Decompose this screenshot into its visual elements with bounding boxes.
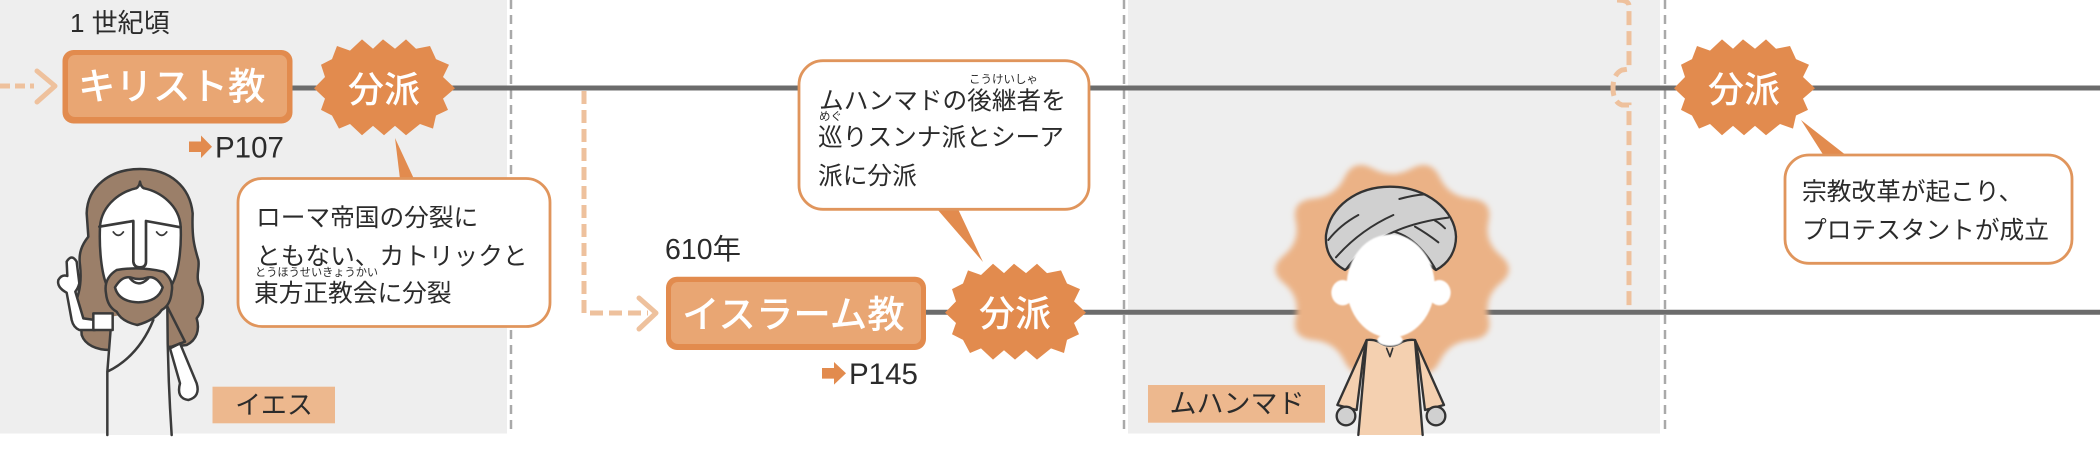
robe: [107, 307, 172, 435]
lowered arm: [170, 343, 198, 400]
callout: Sunni and Shia split: ムハンマドの後継者を: [819, 87, 1066, 115]
figure: Jesus: [58, 169, 203, 435]
badge: schism 3: 分派: [1708, 69, 1780, 110]
arrow: dashed branch to Islam: [584, 91, 656, 329]
callout: Roman Empire split: 東方正教会に分裂: [254, 280, 452, 308]
brow and nose: [99, 221, 181, 267]
badge: schism 1: 分派: [348, 69, 420, 110]
label: Jesus: [212, 387, 335, 423]
callout: Sunni and Shia split: めぐ: [819, 110, 842, 123]
timeline: upper line: [292, 86, 2100, 90]
callout: Reformation: プロテスタントが成立: [1802, 216, 2049, 244]
badge: schism 2: [945, 264, 1086, 360]
beard: [106, 268, 172, 325]
callout: Sunni and Shia split: [799, 61, 1089, 262]
hair: [76, 169, 203, 350]
box: Islam: [666, 277, 926, 350]
callout: Roman Empire split: ともない、カトリックと: [256, 244, 528, 270]
figure: Muhammad: [1326, 187, 1456, 435]
callout: Reformation: [1785, 120, 2072, 263]
box: Christianity: キリスト教: [78, 66, 266, 108]
turban: [1326, 187, 1456, 270]
hands: [1337, 407, 1355, 425]
box: Islam: イスラーム教: [682, 294, 905, 336]
box: Christianity: [62, 50, 292, 124]
eyes: [113, 232, 167, 235]
callout: Reformation: 宗教改革が起こり、: [1802, 178, 2023, 206]
page ref: P145: P145: [849, 358, 918, 391]
callout: Sunni and Shia split: 派に分派: [818, 163, 917, 190]
badge: schism 3: [1674, 39, 1815, 135]
badge: schism 2: 分派: [979, 293, 1051, 334]
raised arm: [58, 257, 95, 330]
callout: Roman Empire split: とうほうせいきょうかい: [255, 266, 378, 279]
callout: Roman Empire split: ローマ帝国の分裂に: [256, 204, 478, 232]
page ref: P107: P107: [215, 131, 284, 164]
text: 1 century date: 1 世紀頃: [70, 8, 170, 38]
torso: [1358, 340, 1423, 435]
label: Jesus: イエス: [235, 390, 313, 420]
panel: gray era band right: [1128, 0, 1660, 434]
label: Muhammad: [1148, 385, 1325, 423]
label: Muhammad: ムハンマド: [1170, 389, 1304, 419]
arrow: dashed line with hop over the timeline: [1613, 0, 1629, 310]
callout: Roman Empire split: [238, 138, 550, 326]
panel: gray era band left: [0, 0, 507, 434]
face: [100, 182, 181, 285]
callout: Sunni and Shia split: こうけいしゃ: [969, 73, 1038, 86]
head: [1331, 234, 1451, 346]
arrow: dashed entry to Christianity: [0, 71, 55, 102]
timeline: lower line: [926, 310, 2100, 315]
arms: [1337, 340, 1367, 410]
text: year 610: 610年: [665, 234, 741, 266]
callout: Sunni and Shia split: 巡りスンナ派とシーア: [818, 124, 1064, 152]
badge: schism 1: [314, 39, 455, 135]
halo: Muhammad: [1275, 165, 1509, 374]
